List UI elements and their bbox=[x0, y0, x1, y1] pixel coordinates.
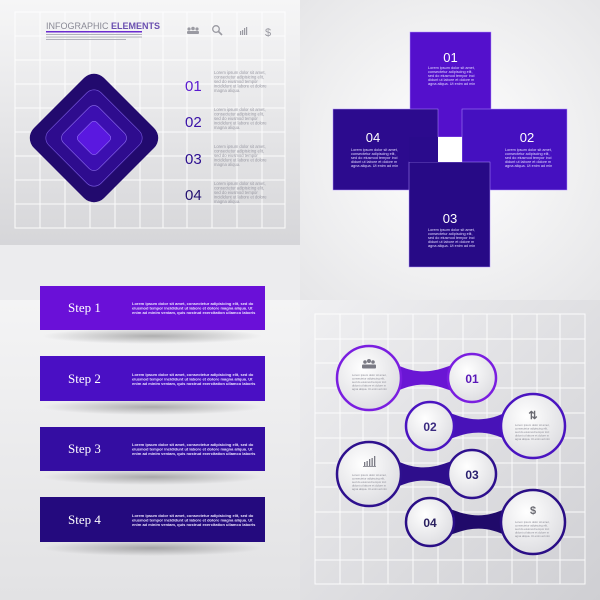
row 04: 04 bbox=[423, 516, 437, 530]
row 03: 03 bbox=[465, 468, 479, 482]
block 04 bbox=[333, 109, 438, 190]
panel: cross bbox=[333, 32, 567, 267]
list: numbers and texts: sed do eiusmod tempor bbox=[214, 116, 258, 121]
row 01: didunt ut labore et dolore m bbox=[352, 384, 387, 388]
list: numbers and texts: incididunt ut labore et dolore bbox=[214, 120, 267, 126]
panel: bottom-right grid bbox=[315, 314, 585, 584]
block 02: sed do eiusmod tempor inci bbox=[505, 156, 552, 160]
step 1: enim ad minim veniam, quis nostrud exercitation ullamco laboris bbox=[132, 310, 256, 315]
row 02: Lorem ipsum dolor sit amet, bbox=[515, 423, 550, 427]
row 02: didunt ut labore et dolore m bbox=[515, 434, 550, 438]
panel: metaball steps bbox=[337, 346, 565, 554]
list: numbers and texts bbox=[185, 70, 267, 204]
row 03: didunt ut labore et dolore m bbox=[352, 484, 387, 488]
panel: steps bbox=[40, 286, 265, 556]
row 02 bbox=[406, 394, 565, 458]
step 1: eiusmod tempor incididunt ut labore et dolore magna aliqua. Ut bbox=[132, 306, 253, 310]
block 01: consectetur adipiscing elit, bbox=[428, 70, 473, 74]
row 03 bbox=[337, 442, 496, 506]
row 03: Lorem ipsum dolor sit amet, bbox=[352, 473, 387, 477]
row 02: consectetur adipiscing elit, bbox=[515, 426, 548, 430]
row 01: consectetur adipiscing elit, bbox=[352, 376, 385, 380]
block 03: sed do eiusmod tempor inci bbox=[428, 236, 475, 240]
block 02: 02 bbox=[520, 130, 534, 145]
block 03: consectetur adipiscing elit, bbox=[428, 232, 473, 236]
row 01 bbox=[337, 346, 496, 410]
row 02: agna aliqua. Ut enim ad min bbox=[515, 437, 550, 441]
block 04: agna aliqua. Ut enim ad min bbox=[351, 164, 398, 168]
list: numbers and texts: 02 bbox=[185, 114, 202, 131]
list: numbers and texts: sed do eiusmod tempor bbox=[214, 190, 258, 195]
row 04: didunt ut labore et dolore m bbox=[515, 530, 550, 534]
list: numbers and texts: incididunt ut labore et dolore bbox=[214, 84, 267, 88]
row 04: agna aliqua. Ut enim ad min bbox=[515, 534, 550, 538]
title: INFOGRAPHIC ELEMENTS bbox=[46, 21, 160, 31]
row 02: sed do eiusmod tempor inci bbox=[515, 430, 550, 434]
block 01 bbox=[410, 32, 491, 137]
block 03 bbox=[409, 137, 490, 267]
list: numbers and texts: 03 bbox=[185, 151, 202, 168]
step 3: Lorem ipsum dolor sit amet, consectetur adipisicing elit, sed do bbox=[132, 442, 254, 447]
panel: top-left grid bbox=[15, 12, 285, 228]
step 4: Lorem ipsum dolor sit amet, consectetur adipisicing elit, sed do bbox=[132, 513, 254, 518]
step 1: Lorem ipsum dolor sit amet, consectetur adipisicing elit, sed do bbox=[132, 301, 254, 306]
list: numbers and texts: Lorem ipsum dolor sit amet, bbox=[214, 181, 266, 186]
list: numbers and texts: sed do eiusmod tempor bbox=[214, 79, 258, 84]
list: numbers and texts: consectetur adipisicing elit, bbox=[214, 186, 264, 190]
row 01: sed do eiusmod tempor inci bbox=[352, 380, 387, 384]
block 03: agna aliqua. Ut enim ad min bbox=[428, 244, 475, 248]
row 03: agna aliqua. Ut enim ad min bbox=[352, 487, 387, 491]
list: numbers and texts: incididunt ut labore et dolore bbox=[214, 194, 267, 200]
step 4 bbox=[40, 497, 265, 542]
list: numbers and texts: 04 bbox=[185, 187, 202, 204]
block 04: Lorem ipsum dolor sit amet, bbox=[351, 148, 398, 152]
block 02: agna aliqua. Ut enim ad min bbox=[505, 164, 552, 168]
step 2: Lorem ipsum dolor sit amet, consectetur adipisicing elit, sed do bbox=[132, 372, 254, 377]
row 01: 01 bbox=[465, 372, 479, 386]
block 04: 04 bbox=[366, 130, 380, 145]
step 3: enim ad minim veniam, quis nostrud exercitation ullamco laboris bbox=[132, 451, 256, 456]
block 01: sed do eiusmod tempor inci bbox=[428, 74, 475, 78]
row 01: agna aliqua. Ut enim ad min bbox=[352, 387, 387, 391]
row 04: consectetur adipiscing elit, bbox=[515, 524, 548, 528]
step 2: eiusmod tempor incididunt ut labore et dolore magna aliqua. Ut bbox=[132, 376, 253, 382]
step 4: eiusmod tempor incididunt ut labore et dolore magna aliqua. Ut bbox=[132, 518, 253, 522]
step 4: Step 4 bbox=[68, 512, 101, 527]
icons: top row bbox=[187, 26, 271, 39]
list: numbers and texts: 01 bbox=[185, 78, 202, 95]
list: numbers and texts: magna aliqua. bbox=[214, 162, 240, 167]
row 01: Lorem ipsum dolor sit amet, bbox=[352, 373, 387, 377]
list: numbers and texts: sed do eiusmod tempor bbox=[214, 153, 258, 158]
block 01: agna aliqua. Ut enim ad min bbox=[428, 82, 475, 86]
step 1 bbox=[40, 286, 265, 330]
step 2 bbox=[40, 356, 265, 401]
list: numbers and texts: magna aliqua. bbox=[214, 88, 240, 93]
block 04: sed do eiusmod tempor inci bbox=[351, 156, 398, 160]
block 02 bbox=[462, 109, 567, 190]
step 2: Step 2 bbox=[68, 371, 101, 386]
block 01: Lorem ipsum dolor sit amet, bbox=[428, 66, 475, 70]
row 03: consectetur adipiscing elit, bbox=[352, 476, 385, 480]
block 02: consectetur adipiscing elit, bbox=[505, 152, 550, 156]
row 04: $ bbox=[530, 505, 536, 517]
row 04 bbox=[406, 490, 565, 554]
block 01: didunt ut labore et dolore m bbox=[428, 78, 474, 82]
block 03: didunt ut labore et dolore m bbox=[428, 240, 474, 244]
block 04: didunt ut labore et dolore m bbox=[351, 160, 397, 164]
block 02: didunt ut labore et dolore m bbox=[505, 160, 551, 164]
row 02: 02 bbox=[423, 420, 437, 434]
title bbox=[46, 21, 160, 40]
step 4: enim ad minim veniam, quis nostrud exercitation ullamco laboris bbox=[132, 522, 256, 527]
block 03: 03 bbox=[443, 211, 457, 226]
row 02: ⇅ bbox=[528, 410, 538, 422]
list: numbers and texts: Lorem ipsum dolor sit amet, bbox=[214, 70, 266, 75]
list: numbers and texts: magna aliqua. bbox=[214, 199, 240, 204]
row 04: sed do eiusmod tempor inci bbox=[515, 527, 550, 531]
step 3: eiusmod tempor incididunt ut labore et dolore magna aliqua. Ut bbox=[132, 446, 253, 452]
list: numbers and texts: consectetur adipisicing elit, bbox=[214, 148, 264, 154]
step 1: Step 1 bbox=[68, 300, 101, 315]
list: numbers and texts: consectetur adipisicing elit, bbox=[214, 74, 264, 80]
step 2: enim ad minim veniam, quis nostrud exercitation ullamco laboris bbox=[132, 381, 256, 386]
row 04: Lorem ipsum dolor sit amet, bbox=[515, 520, 550, 524]
step 3: Step 3 bbox=[68, 441, 101, 456]
block 02: Lorem ipsum dolor sit amet, bbox=[505, 148, 552, 152]
list: numbers and texts: incididunt ut labore et dolore bbox=[214, 158, 267, 162]
list: numbers and texts: consectetur adipisicing elit, bbox=[214, 112, 264, 116]
list: numbers and texts: magna aliqua. bbox=[214, 125, 240, 130]
list: numbers and texts: Lorem ipsum dolor sit amet, bbox=[214, 107, 266, 112]
step 3 bbox=[40, 427, 265, 471]
icons: top row: $ bbox=[265, 27, 271, 39]
row 03: sed do eiusmod tempor inci bbox=[352, 480, 387, 484]
block 03: Lorem ipsum dolor sit amet, bbox=[428, 228, 475, 232]
block 01: 01 bbox=[443, 50, 458, 65]
block 04: consectetur adipiscing elit, bbox=[351, 152, 396, 156]
diamond bbox=[24, 68, 164, 208]
list: numbers and texts: Lorem ipsum dolor sit amet, bbox=[214, 144, 266, 149]
